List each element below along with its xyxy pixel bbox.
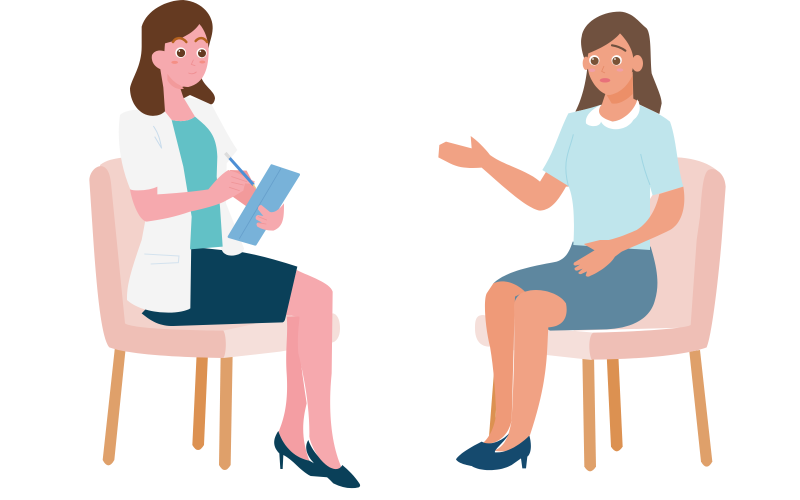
face <box>587 33 633 95</box>
teal shirt <box>172 117 223 249</box>
lab coat far side <box>183 97 244 256</box>
neck and chest <box>159 63 195 121</box>
skirt <box>493 242 657 331</box>
front leg <box>285 270 343 471</box>
shirt <box>542 103 683 250</box>
hand on tablet <box>256 203 284 231</box>
pencil <box>225 153 256 188</box>
far hand <box>230 170 257 209</box>
shoes <box>456 433 531 470</box>
skirt <box>142 247 297 326</box>
nose <box>602 66 605 73</box>
eyes <box>175 47 207 58</box>
near arm <box>438 136 573 211</box>
ear <box>152 50 167 70</box>
neck shadow <box>607 75 633 104</box>
doctor: legs and shoes <box>142 247 360 488</box>
eyes <box>589 55 622 65</box>
mouth <box>600 78 610 82</box>
neck <box>595 72 639 122</box>
eyebrows <box>173 38 207 42</box>
hair <box>130 0 215 116</box>
cheeks <box>589 68 623 72</box>
tablet <box>229 166 299 244</box>
back leg <box>279 316 309 461</box>
lab coat pocket <box>144 254 179 264</box>
chair: patient <box>456 157 726 471</box>
collar <box>586 99 640 129</box>
near arm <box>130 170 255 222</box>
resting arm <box>584 187 684 252</box>
back leg <box>482 281 525 444</box>
face <box>164 24 209 87</box>
rear shoe <box>274 431 328 477</box>
doctor: upper body <box>119 0 299 313</box>
front shoe <box>306 440 360 488</box>
chair: doctor <box>89 158 340 470</box>
lab coat main <box>119 109 192 313</box>
cheeks <box>171 60 205 64</box>
shirt creases <box>566 134 650 186</box>
hair <box>575 12 662 114</box>
finger lines <box>229 177 247 191</box>
patient: upper body <box>438 12 684 252</box>
sleeve crease <box>153 126 162 148</box>
eyebrows <box>590 45 625 51</box>
patient: hand on lap <box>574 240 627 277</box>
neck shadow <box>167 74 184 89</box>
ears <box>583 55 643 72</box>
front leg <box>494 290 567 451</box>
nose and mouth <box>189 60 196 74</box>
